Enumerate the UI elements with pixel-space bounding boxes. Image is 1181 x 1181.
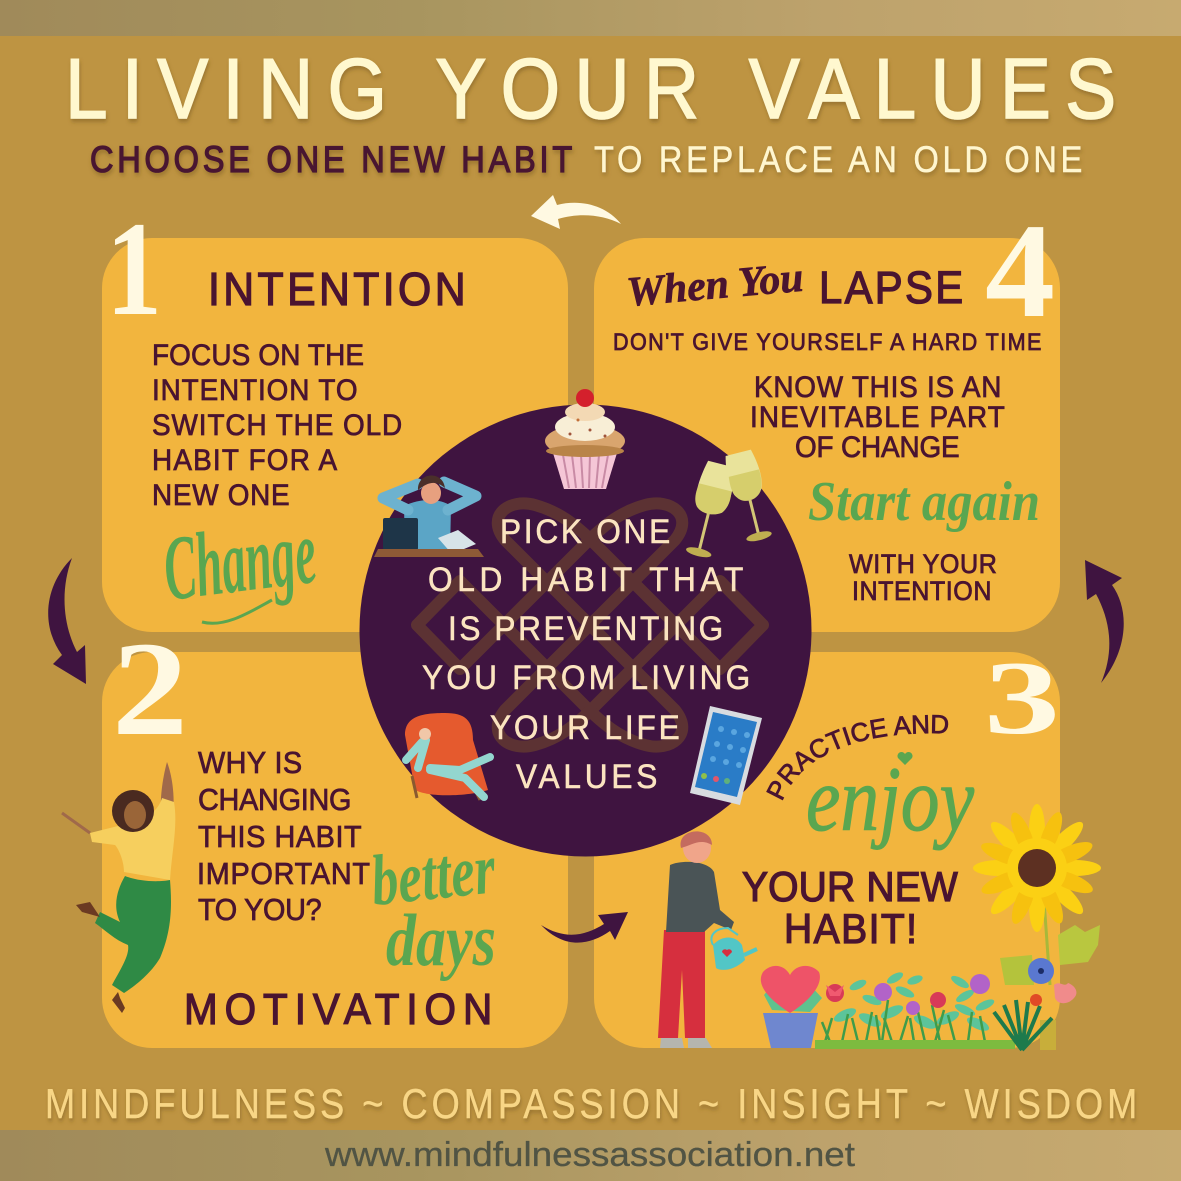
icon: phone (690, 706, 762, 805)
endless knot (417, 503, 763, 747)
text block: with your intention: INTENTION (852, 575, 992, 606)
footer values: MINDFULNESS ~ COMPASSION ~ INSIGHT ~ WISDOM (45, 1082, 1137, 1128)
subtitle (90, 139, 1082, 180)
arrow: right dark (1085, 560, 1124, 683)
center text: YOUR LIFE (490, 708, 680, 746)
text block: with your intention: WITH YOUR (849, 548, 997, 579)
text block: why: THIS HABIT (198, 820, 362, 854)
icon: cupcake (545, 389, 625, 489)
text block: know this: OF CHANGE (795, 431, 960, 464)
icon: stressed person at desk (374, 475, 484, 557)
corner tint (1040, 1020, 1056, 1050)
center circle (360, 404, 812, 856)
text block: why: CHANGING (198, 783, 351, 817)
text block: know this: INEVITABLE PART (750, 401, 1005, 434)
sunflower (973, 804, 1101, 985)
script: when you: When You (625, 255, 805, 316)
heading: your new habit: YOUR NEW (742, 863, 958, 910)
title: LIVING YOUR VALUES (65, 42, 1116, 137)
website: www.mindfulnessassociation.net (324, 1136, 856, 1174)
red flower (1030, 994, 1042, 1006)
text block: why: WHY IS (198, 746, 302, 780)
script: change (158, 500, 321, 623)
icon: champagne glasses (681, 449, 776, 560)
text block: know this: KNOW THIS IS AN (754, 371, 1001, 404)
text block: why (197, 746, 370, 927)
text block: dont give: DON'T GIVE YOURSELF A HARD TIME (613, 328, 1041, 355)
blue flower (1028, 958, 1054, 984)
panel: when you lapse (594, 238, 1060, 632)
bottom band (0, 1130, 1181, 1181)
center text: OLD HABIT THAT (428, 560, 743, 598)
panel: intention (102, 238, 568, 632)
icon: dancing woman (62, 762, 175, 1013)
center text: VALUES (516, 757, 657, 795)
script: better days: days (386, 900, 496, 982)
subtitle: TO REPLACE AN OLD ONE (594, 139, 1082, 180)
heading: your new habit: HABIT! (784, 905, 917, 952)
heading: intention: INTENTION (208, 265, 466, 315)
panel: practice (594, 652, 1060, 1050)
curved text: practice and: PRACTICE AND (766, 714, 948, 800)
text block: focus: HABIT FOR A (152, 444, 338, 477)
numeral 4: 4 (985, 197, 1055, 346)
script: enjoy: enjoy (806, 748, 974, 850)
arrow: left dark (48, 558, 86, 684)
script: change: Change (158, 500, 321, 620)
top band (0, 0, 1181, 36)
script: better days (367, 828, 500, 982)
leaves (1058, 925, 1100, 965)
panel: motivation (102, 652, 568, 1048)
potted heart plant (761, 966, 822, 1048)
text block: why: IMPORTANT (197, 857, 370, 891)
heading: your new habit (742, 863, 958, 952)
grass and flowers (815, 970, 1015, 1049)
illustration: garden (761, 804, 1101, 1050)
text block: focus: NEW ONE (152, 479, 290, 512)
heading: motivation: MOTIVATION (184, 984, 492, 1033)
subtitle: CHOOSE ONE NEW HABIT (90, 139, 572, 180)
icon: gardener (658, 831, 757, 1048)
numeral 2: 2 (112, 615, 188, 764)
text block: focus: FOCUS ON THE (152, 339, 364, 372)
arrow: middle dark (541, 912, 628, 943)
script: start again: Start again (808, 471, 1040, 533)
text block: focus: SWITCH THE OLD (152, 409, 402, 442)
text block: focus (152, 339, 402, 512)
text block: know this (750, 371, 1005, 464)
arrow: top white (531, 195, 621, 229)
center text: YOU FROM LIVING (422, 658, 750, 696)
text block: with your intention (849, 548, 997, 606)
icon: person on armchair (405, 713, 490, 800)
script: better days: better (367, 828, 500, 921)
center text: PICK ONE (500, 512, 670, 550)
pink flower (1054, 983, 1076, 1003)
heading: lapse: LAPSE (819, 264, 963, 313)
text block: why: TO YOU? (198, 893, 322, 927)
numeral 3: 3 (984, 639, 1060, 756)
text block: focus: INTENTION TO (152, 374, 358, 407)
center text (422, 512, 750, 795)
numeral 1: 1 (106, 195, 162, 344)
center text: IS PREVENTING (448, 609, 723, 647)
grass tuft (994, 1000, 1052, 1050)
